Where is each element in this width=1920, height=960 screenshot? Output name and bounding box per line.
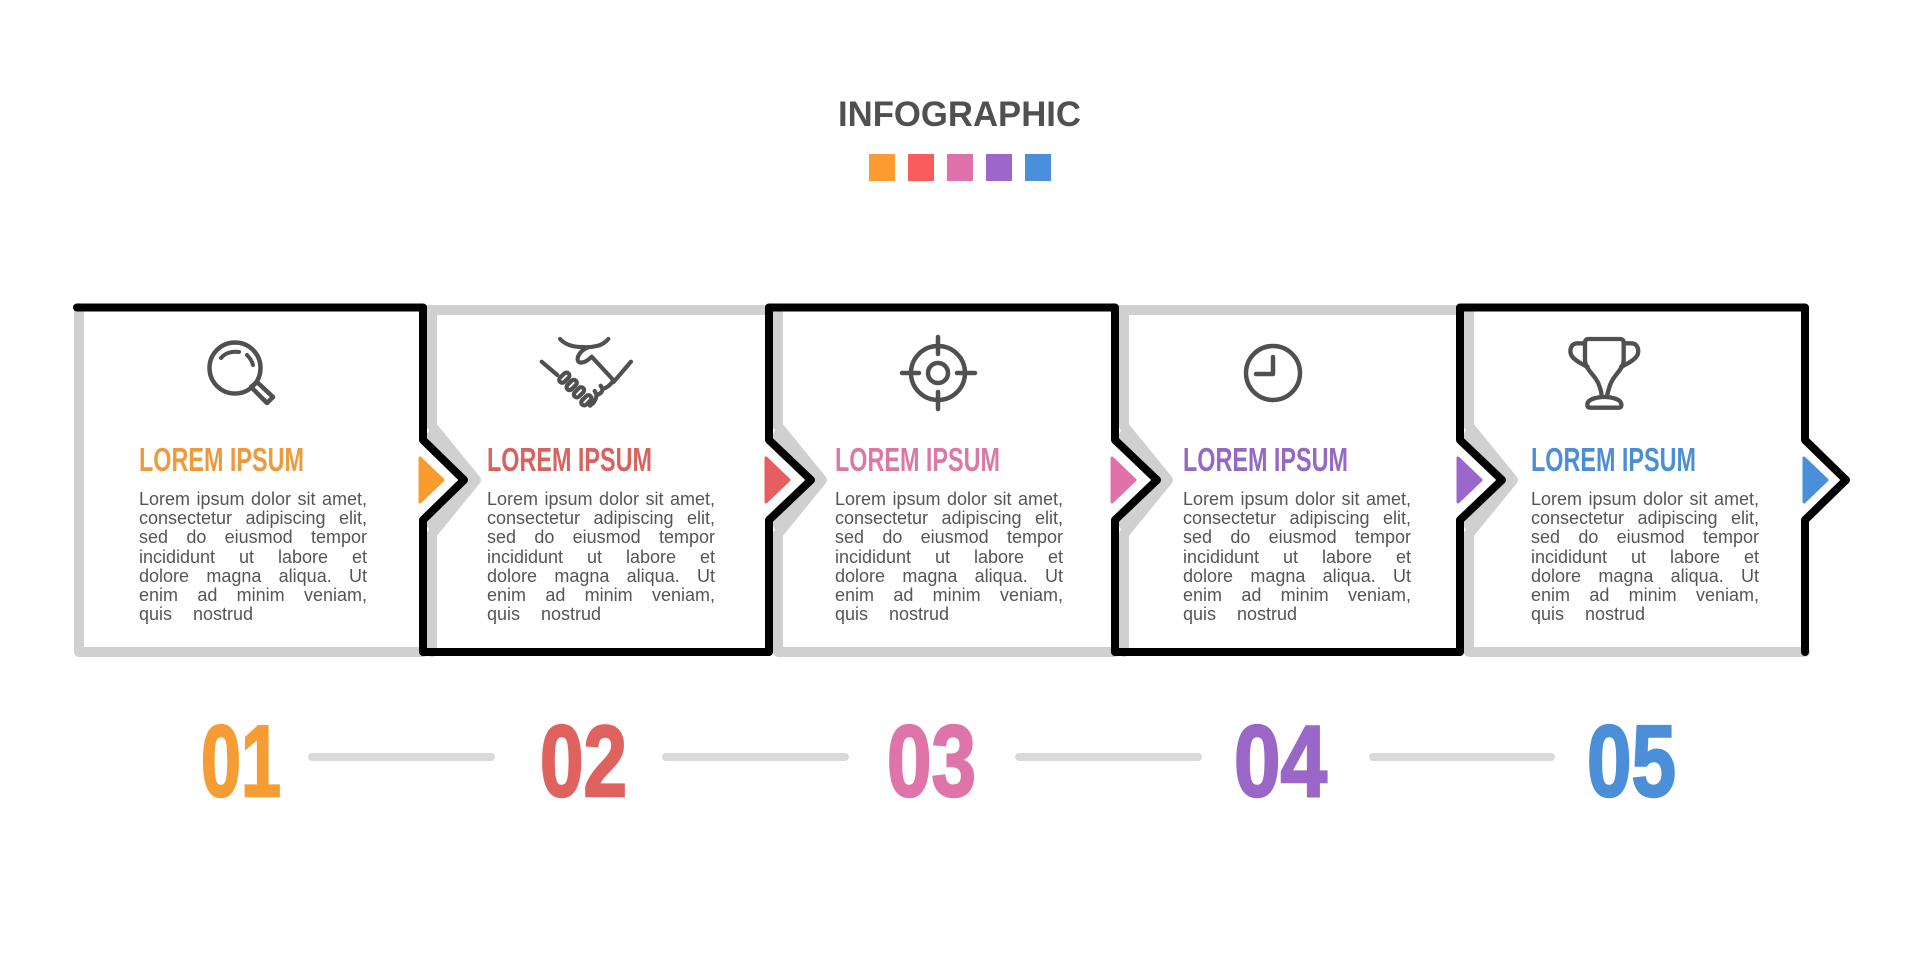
- heading: step 3: LOREM IPSUM: [835, 441, 1000, 478]
- text block: step 4: enim ad minim veniam,: [1183, 585, 1411, 605]
- text block: step 4: quis nostrud: [1183, 604, 1297, 624]
- icon: trophy: [1568, 336, 1640, 410]
- text block: step 4: [1183, 489, 1411, 624]
- text block: step 5: dolore magna aliqua. Ut: [1531, 566, 1759, 586]
- text block: step 5: enim ad minim veniam,: [1531, 585, 1759, 605]
- heading: step 1: LOREM IPSUM: [139, 441, 304, 478]
- text block: step 2: sed do eiusmod tempor: [487, 527, 715, 547]
- text block: step 3: enim ad minim veniam,: [835, 585, 1063, 605]
- heading: step 4: LOREM IPSUM: [1183, 441, 1348, 478]
- text block: step 3: Lorem ipsum dolor sit amet,: [835, 489, 1063, 509]
- icon: magnifying glass: [207, 340, 276, 406]
- numbers 01 to 05: 05: [1587, 706, 1676, 818]
- colour legend squares: [869, 154, 1051, 181]
- panel: step 2: [487, 336, 715, 624]
- text block: step 4: incididunt ut labore et: [1183, 547, 1411, 567]
- connector lines: [312, 753, 1551, 761]
- text block: step 3: quis nostrud: [835, 604, 949, 624]
- icon: handshake: [540, 336, 634, 408]
- heading: step 5: LOREM IPSUM: [1531, 441, 1696, 478]
- text block: step 1: [139, 489, 367, 624]
- text block: step 2: Lorem ipsum dolor sit amet,: [487, 489, 715, 509]
- text block: step 5: quis nostrud: [1531, 604, 1645, 624]
- text block: step 1: dolore magna aliqua. Ut: [139, 566, 367, 586]
- text block: step 2: quis nostrud: [487, 604, 601, 624]
- text block: step 5: sed do eiusmod tempor: [1531, 527, 1759, 547]
- text block: step 2: consectetur adipiscing elit,: [487, 508, 715, 528]
- text block: step 2: [487, 489, 715, 624]
- text block: step 1: quis nostrud: [139, 604, 253, 624]
- panel: step 4: [1183, 344, 1411, 624]
- text block: step 3: consectetur adipiscing elit,: [835, 508, 1063, 528]
- text block: step 1: consectetur adipiscing elit,: [139, 508, 367, 528]
- text block: step 1: enim ad minim veniam,: [139, 585, 367, 605]
- panel: step 5: [1531, 336, 1759, 624]
- text block: step 3: sed do eiusmod tempor: [835, 527, 1063, 547]
- text block: step 4: sed do eiusmod tempor: [1183, 527, 1411, 547]
- text block: step 2: enim ad minim veniam,: [487, 585, 715, 605]
- numbers 01 to 05: 04: [1234, 706, 1327, 818]
- icon: target: [900, 334, 978, 412]
- text block: step 1: incididunt ut labore et: [139, 547, 367, 567]
- text block: step 5: incididunt ut labore et: [1531, 547, 1759, 567]
- text block: step 3: incididunt ut labore et: [835, 547, 1063, 567]
- text block: step 1: Lorem ipsum dolor sit amet,: [139, 489, 367, 509]
- text block: step 5: [1531, 489, 1759, 624]
- text block: step 3: dolore magna aliqua. Ut: [835, 566, 1063, 586]
- text block: step 5: consectetur adipiscing elit,: [1531, 508, 1759, 528]
- text block: step 1: sed do eiusmod tempor: [139, 527, 367, 547]
- text block: step 3: [835, 489, 1063, 624]
- heading: step 2: LOREM IPSUM: [487, 441, 652, 478]
- numbers 01 to 05: 02: [540, 706, 627, 818]
- text block: step 2: dolore magna aliqua. Ut: [487, 566, 715, 586]
- text block: step 4: Lorem ipsum dolor sit amet,: [1183, 489, 1411, 509]
- text block: step 5: Lorem ipsum dolor sit amet,: [1531, 489, 1759, 509]
- numbers 01 to 05: 03: [887, 706, 976, 818]
- text block: step 4: dolore magna aliqua. Ut: [1183, 566, 1411, 586]
- icon: clock: [1244, 344, 1302, 402]
- panel: step 1: [139, 340, 367, 624]
- numbers 01 to 05: [201, 706, 1676, 818]
- text block: step 4: consectetur adipiscing elit,: [1183, 508, 1411, 528]
- numbers 01 to 05: 01: [201, 706, 281, 818]
- panel: step 3: [835, 334, 1063, 624]
- text block: step 2: incididunt ut labore et: [487, 547, 715, 567]
